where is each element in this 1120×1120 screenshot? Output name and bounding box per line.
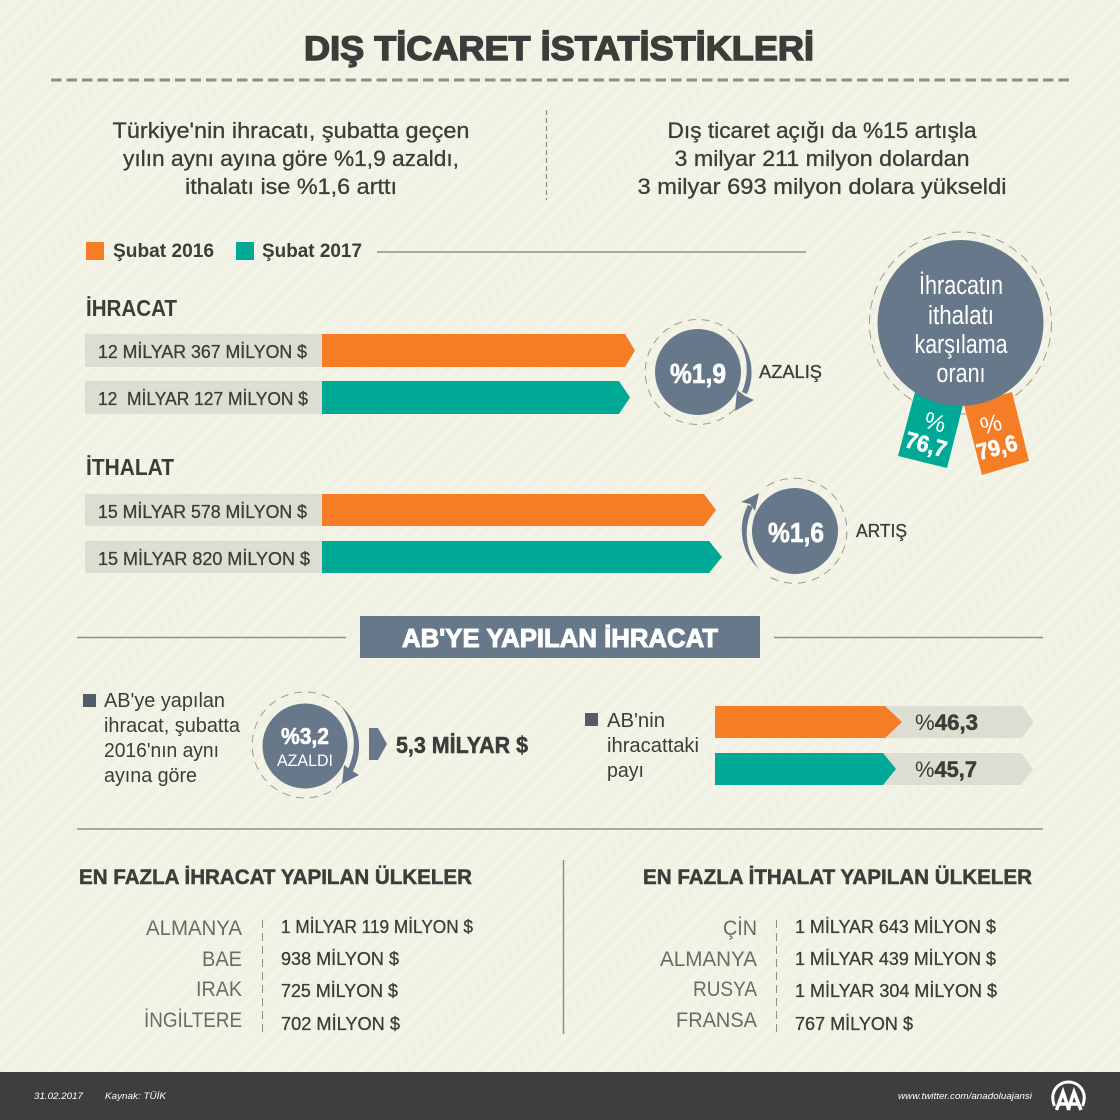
bar: ihracat 2016 bbox=[85, 334, 635, 367]
table: ithalat ülkeleri: 1 MİLYAR 304 MİLYON $ bbox=[795, 980, 997, 1001]
arrow bbox=[369, 728, 387, 760]
text block: AB'nin ihracattaki payı: AB'nin bbox=[607, 710, 665, 732]
table: ithalat ülkeleri: ALMANYA bbox=[660, 948, 757, 971]
table: ihracat ülkeleri: 938 MİLYON $ bbox=[281, 948, 399, 969]
footer bar: Kaynak: TÜİK bbox=[105, 1091, 167, 1102]
footer bar bbox=[0, 1072, 1120, 1120]
footer bar: 31.02.2017 bbox=[34, 1091, 84, 1102]
bar: AB payı 2016 bbox=[715, 706, 1034, 738]
intro text: left: yılın aynı ayına göre %1,9 azaldı, bbox=[123, 146, 459, 171]
arrow: decrease bbox=[340, 705, 359, 784]
table: ihracat ülkeleri: 702 MİLYON $ bbox=[281, 1013, 400, 1034]
ribbon: 76,7 bbox=[898, 392, 963, 468]
ribbon: 76,7: % bbox=[921, 407, 949, 439]
intro text: left: ithalatı ise %1,6 arttı bbox=[185, 174, 397, 199]
bar: AB payı 2017: %45,7 bbox=[915, 757, 977, 782]
bar: ithalat 2017: 15 MİLYAR 820 MİLYON $ bbox=[98, 548, 310, 569]
ribbon: 79,6: % bbox=[977, 409, 1005, 441]
badge: %1,6 artış: %1,6 bbox=[768, 517, 824, 548]
text block: AB'ye yapılan: ayına göre bbox=[104, 765, 197, 787]
ribbon: 76,7: 76,7 bbox=[902, 426, 950, 462]
badge: %3,2 azaldı: %3,2 bbox=[281, 723, 329, 749]
bar: ithalat 2017 bbox=[85, 541, 722, 573]
icon: AA logo bbox=[1053, 1082, 1084, 1110]
heading: ithalat: İTHALAT bbox=[86, 454, 174, 480]
table: ihracat ülkeleri: 1 MİLYAR 119 MİLYON $ bbox=[281, 916, 473, 937]
bar: ithalat 2016: 15 MİLYAR 578 MİLYON $ bbox=[98, 501, 307, 522]
heading: ihracat: İHRACAT bbox=[86, 295, 177, 321]
badge: %1,9 azalış: %1,9 bbox=[670, 358, 726, 389]
badge: %3,2 azaldı: AZALDI bbox=[277, 751, 333, 770]
ribbon medal: ihracatın ithalatı karşılama oranı: oranı bbox=[936, 360, 986, 388]
bar: ithalat 2016 bbox=[85, 494, 716, 526]
heading: en fazla ithalat: EN FAZLA İTHALAT YAPILAN ÜLKELER bbox=[643, 864, 1032, 889]
table: ithalat ülkeleri: 767 MİLYON $ bbox=[795, 1013, 913, 1034]
table: ihracat ülkeleri: 725 MİLYON $ bbox=[281, 980, 398, 1001]
value: 5,3 milyar: 5,3 MİLYAR $ bbox=[396, 732, 528, 758]
table: ithalat ülkeleri: 1 MİLYAR 439 MİLYON $ bbox=[795, 948, 996, 969]
ribbon medal: ihracatın ithalatı karşılama oranı: karşılama bbox=[914, 331, 1008, 359]
text block: AB'ye yapılan: ihracat, şubatta bbox=[104, 715, 241, 737]
section banner: AB'ye yapılan ihracat: AB'YE YAPILAN İHRACAT bbox=[402, 623, 718, 653]
bar: ihracat 2016: 12 MİLYAR 367 MİLYON $ bbox=[98, 341, 307, 362]
ribbon medal: ihracatın ithalatı karşılama oranı: İhracatın bbox=[919, 271, 1003, 300]
table: ihracat ülkeleri: IRAK bbox=[196, 978, 242, 1001]
table: ithalat ülkeleri: FRANSA bbox=[676, 1009, 757, 1032]
intro text: left: Türkiye'nin ihracatı, şubatta geçen bbox=[112, 118, 469, 143]
ribbon medal: ihracatın ithalatı karşılama oranı: ithalatı bbox=[928, 302, 994, 330]
intro text: right: Dış ticaret açığı da %15 artışla bbox=[668, 118, 977, 143]
bar: ihracat 2017: 12 MİLYAR 127 MİLYON $ bbox=[98, 388, 308, 409]
label: artış: ARTIŞ bbox=[856, 520, 907, 541]
ribbon medal: ihracatın ithalatı karşılama oranı bbox=[870, 232, 1052, 475]
table: ihracat ülkeleri: İNGİLTERE bbox=[144, 1009, 242, 1032]
text block: AB'ye yapılan: AB'ye yapılan bbox=[104, 690, 225, 712]
legend: Şubat 2016 bbox=[113, 240, 214, 262]
table: ihracat ülkeleri: BAE bbox=[202, 948, 242, 971]
bar: AB payı 2017 bbox=[715, 753, 1033, 785]
text block: AB'nin ihracattaki payı bbox=[585, 710, 699, 782]
table: ithalat ülkeleri bbox=[660, 916, 997, 1034]
table: ihracat ülkeleri bbox=[144, 916, 473, 1034]
badge: %3,2 azaldı bbox=[252, 692, 359, 798]
footer bar: www.twitter.com/anadoluajansi bbox=[898, 1091, 1033, 1102]
ribbon: 79,6: 79,6 bbox=[974, 429, 1020, 465]
table: ithalat ülkeleri: RUSYA bbox=[693, 978, 757, 1001]
badge: %1,9 azalış bbox=[645, 319, 754, 424]
text block: AB'ye yapılan: 2016'nın aynı bbox=[104, 740, 219, 762]
intro text: right: 3 milyar 693 milyon dolara yükseldi bbox=[638, 174, 1006, 199]
bar: ihracat 2017 bbox=[85, 381, 630, 414]
heading: en fazla ihracat: EN FAZLA İHRACAT YAPILAN ÜLKELER bbox=[79, 864, 472, 889]
intro text: right: 3 milyar 211 milyon dolardan bbox=[674, 146, 970, 171]
table: ithalat ülkeleri: ÇİN bbox=[723, 917, 757, 940]
intro text: left bbox=[112, 118, 469, 199]
text block: AB'nin ihracattaki payı: ihracattaki bbox=[607, 735, 699, 757]
legend: Şubat 2017 bbox=[262, 240, 362, 262]
table: ihracat ülkeleri: ALMANYA bbox=[146, 917, 242, 940]
text block: AB'ye yapılan bbox=[83, 690, 241, 787]
label: azalış: AZALIŞ bbox=[759, 361, 822, 382]
legend bbox=[86, 240, 362, 262]
arrow: decrease bbox=[735, 334, 754, 411]
text block: AB'nin ihracattaki payı: payı bbox=[607, 760, 644, 782]
title: DIŞ TİCARET İSTATİSTİKLERİ bbox=[304, 30, 814, 68]
section banner: AB'ye yapılan ihracat bbox=[360, 616, 760, 658]
table: ithalat ülkeleri: 1 MİLYAR 643 MİLYON $ bbox=[795, 916, 996, 937]
intro text: right bbox=[638, 118, 1006, 199]
badge: %1,6 artış bbox=[741, 478, 847, 583]
bar: AB payı 2016: %46,3 bbox=[915, 710, 978, 735]
ribbon: 79,6 bbox=[964, 392, 1029, 475]
arrow: increase bbox=[741, 493, 759, 569]
